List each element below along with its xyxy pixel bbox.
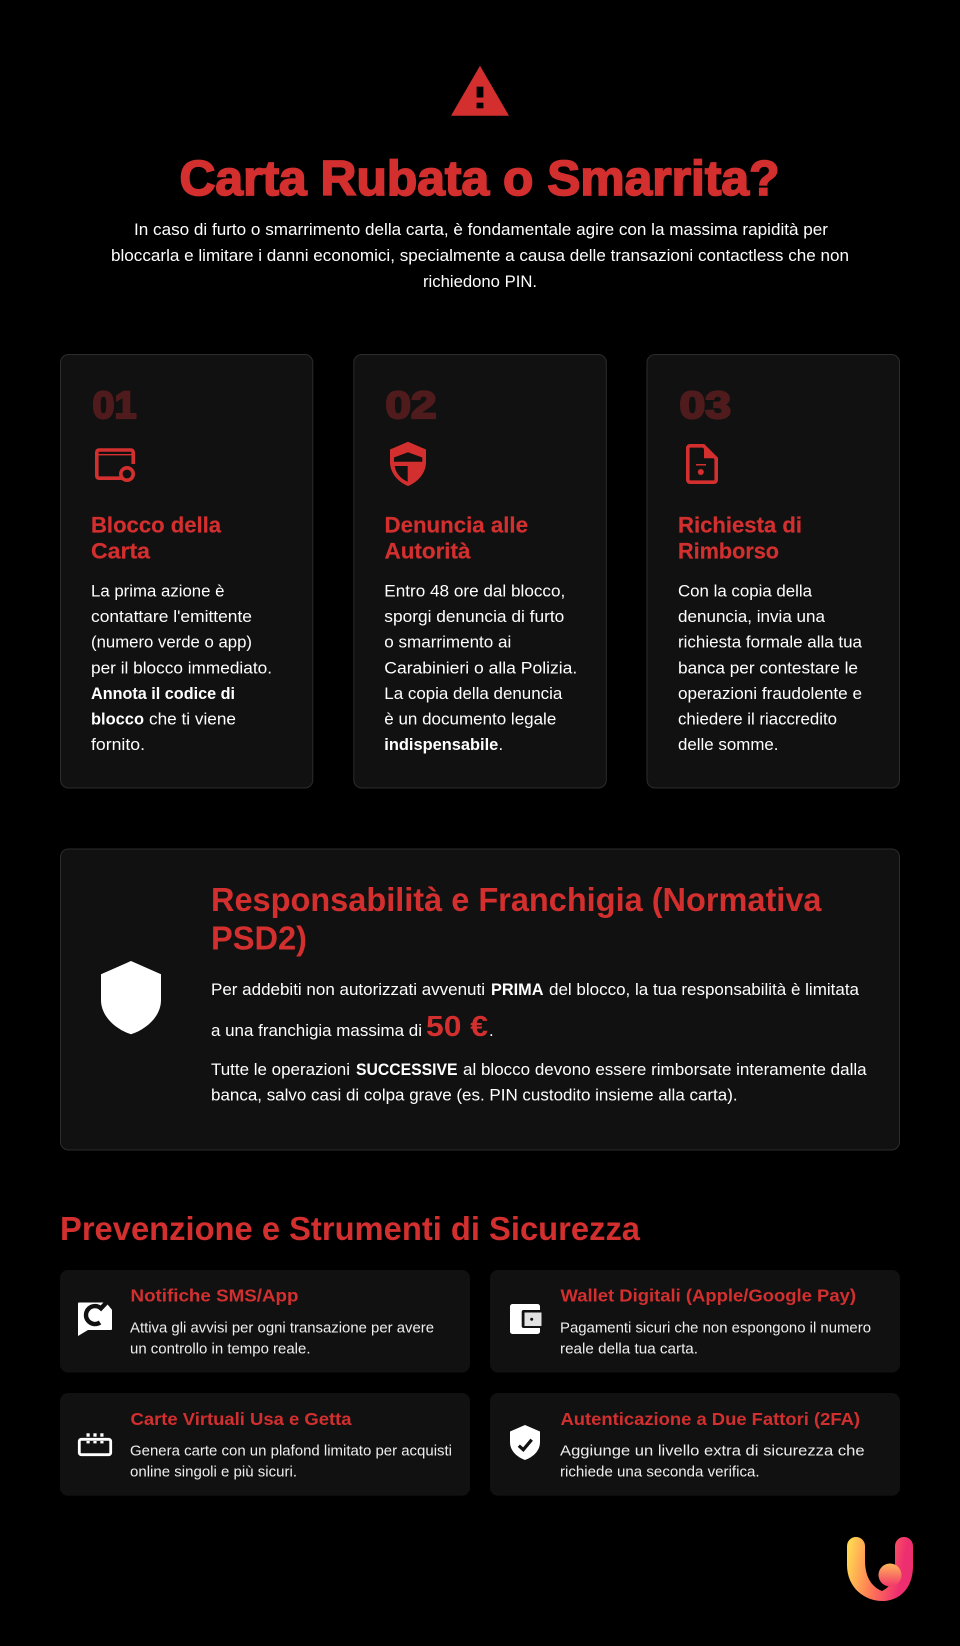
paragraph: prima del blocco: a una franchigia massima di (211, 1021, 422, 1040)
tip title: Carte Virtuali Usa e Getta (130, 1409, 352, 1429)
paragraph: prima del blocco: . (489, 1021, 494, 1040)
step number 03: 03 (680, 385, 731, 427)
amount 50 euro: 50 € (426, 1011, 488, 1043)
tip: autenticazione due fattori (490, 1393, 900, 1496)
panel: step 2 denuncia (354, 354, 606, 788)
panel heading: Responsabilità e Franchigia (Normativa (211, 881, 822, 918)
icon: warning triangle (451, 66, 509, 116)
icon: chat bubble (78, 1302, 113, 1336)
tip description: Genera carte con un plafond limitato per acquisti (130, 1444, 452, 1460)
intro text: bloccarla e limitare i danni economici, specialmente a causa delle transazioni contactless che non (111, 246, 849, 265)
icon: shield check (510, 1425, 540, 1460)
heading: Blocco della (91, 513, 221, 538)
paragraph: prima del blocco: del blocco, la tua responsabilità è limitata (549, 980, 860, 999)
body text: La prima azione è (91, 582, 224, 600)
tip description: Pagamenti sicuri che non espongono il numero (560, 1321, 871, 1337)
paragraph: successive al blocco: al blocco devono essere rimborsate interamente dalla (463, 1060, 867, 1079)
tip description: online singoli e più sicuri. (130, 1464, 297, 1480)
heading: Carta (91, 538, 150, 564)
panel: step 1 blocco della carta (60, 354, 313, 788)
tip description (560, 1444, 865, 1480)
heading (678, 513, 802, 564)
body text: per il blocco immediato. (91, 658, 272, 677)
body text: blocco (91, 710, 144, 728)
heading (384, 513, 528, 564)
body text: delle somme. (678, 735, 778, 754)
heading: Richiesta di (678, 513, 802, 538)
icon: white shield (101, 961, 161, 1034)
intro text: richiedono PIN. (423, 272, 537, 291)
paragraph: successive al blocco: banca, salvo casi di colpa grave (es. PIN custodito insieme alla carta). (211, 1086, 738, 1105)
paragraph: successive al blocco: SUCCESSIVE (356, 1060, 458, 1079)
tip description (560, 1321, 871, 1358)
paragraph: prima del blocco (211, 980, 860, 1043)
panel: step 3 rimborso (647, 354, 900, 788)
heading (91, 513, 221, 564)
body text: banca per contestare le (678, 658, 858, 677)
tip: wallet digitali (490, 1270, 900, 1372)
icon: card with lock (97, 450, 133, 480)
tip description: reale della tua carta. (560, 1342, 698, 1358)
tip description (130, 1444, 452, 1480)
body text: chiedere il riaccredito (678, 710, 837, 728)
paragraph: successive al blocco (211, 1060, 867, 1105)
body text: sporgi denuncia di furto (384, 607, 564, 626)
panel: responsabilità e franchigia (60, 849, 900, 1150)
heading: Autorità (384, 538, 471, 564)
tip description: Aggiunge un livello extra di sicurezza che (560, 1444, 865, 1460)
tip description: Attiva gli avvisi per ogni transazione per avere (130, 1321, 434, 1337)
tip title: Autenticazione a Due Fattori (2FA) (560, 1409, 860, 1429)
title: Carta Rubata o Smarrita? (180, 152, 780, 206)
icon: wallet (510, 1304, 542, 1334)
body text (384, 582, 577, 754)
step number 01: 01 (92, 385, 136, 427)
tip title: Notifiche SMS/App (130, 1286, 299, 1306)
paragraph: successive al blocco: Tutte le operazioni (211, 1060, 350, 1079)
body text: che ti viene (149, 710, 236, 728)
panel heading: PSD2) (211, 920, 307, 956)
body text: richiesta formale alla tua (678, 633, 863, 652)
body text (91, 582, 272, 754)
section heading: Prevenzione e Strumenti di Sicurezza (60, 1210, 641, 1247)
body text: contattare l'emittente (91, 607, 252, 626)
body text: operazioni fraudolente e (678, 684, 862, 703)
body text (678, 582, 863, 754)
tip description: un controllo in tempo reale. (130, 1342, 310, 1358)
tip description (130, 1321, 434, 1358)
body text: Annota il codice di (91, 684, 235, 703)
tip title: Wallet Digitali (Apple/Google Pay) (560, 1286, 856, 1306)
tip description: richiede una seconda verifica. (560, 1464, 760, 1480)
logo (847, 1537, 913, 1601)
tip: notifiche (60, 1270, 470, 1372)
body text: o smarrimento ai (384, 633, 511, 652)
body text: indispensabile (384, 735, 498, 754)
icon: police shield (390, 442, 426, 486)
icon: virtual card (79, 1433, 111, 1455)
intro text: In caso di furto o smarrimento della carta, è fondamentale agire con la massima rapidità per (134, 220, 828, 239)
intro text (111, 220, 849, 291)
paragraph: prima del blocco: Per addebiti non autorizzati avvenuti (211, 980, 485, 999)
step number 02: 02 (386, 385, 436, 427)
icon: document (688, 444, 718, 482)
body text: (numero verde o app) (91, 633, 252, 652)
body text: fornito. (91, 735, 145, 754)
paragraph: prima del blocco: PRIMA (491, 980, 544, 999)
body text: Entro 48 ore dal blocco, (384, 582, 565, 600)
body text: . (498, 735, 503, 754)
body text: La copia della denuncia (384, 684, 563, 703)
body text: è un documento legale (384, 710, 556, 728)
panel heading (211, 881, 822, 956)
heading: Denuncia alle (384, 513, 528, 538)
heading: Rimborso (678, 538, 779, 564)
body text: denuncia, invia una (678, 607, 826, 626)
body text: Carabinieri o alla Polizia. (384, 658, 577, 677)
tip: carte virtuali (60, 1393, 470, 1496)
body text: Con la copia della (678, 582, 813, 600)
